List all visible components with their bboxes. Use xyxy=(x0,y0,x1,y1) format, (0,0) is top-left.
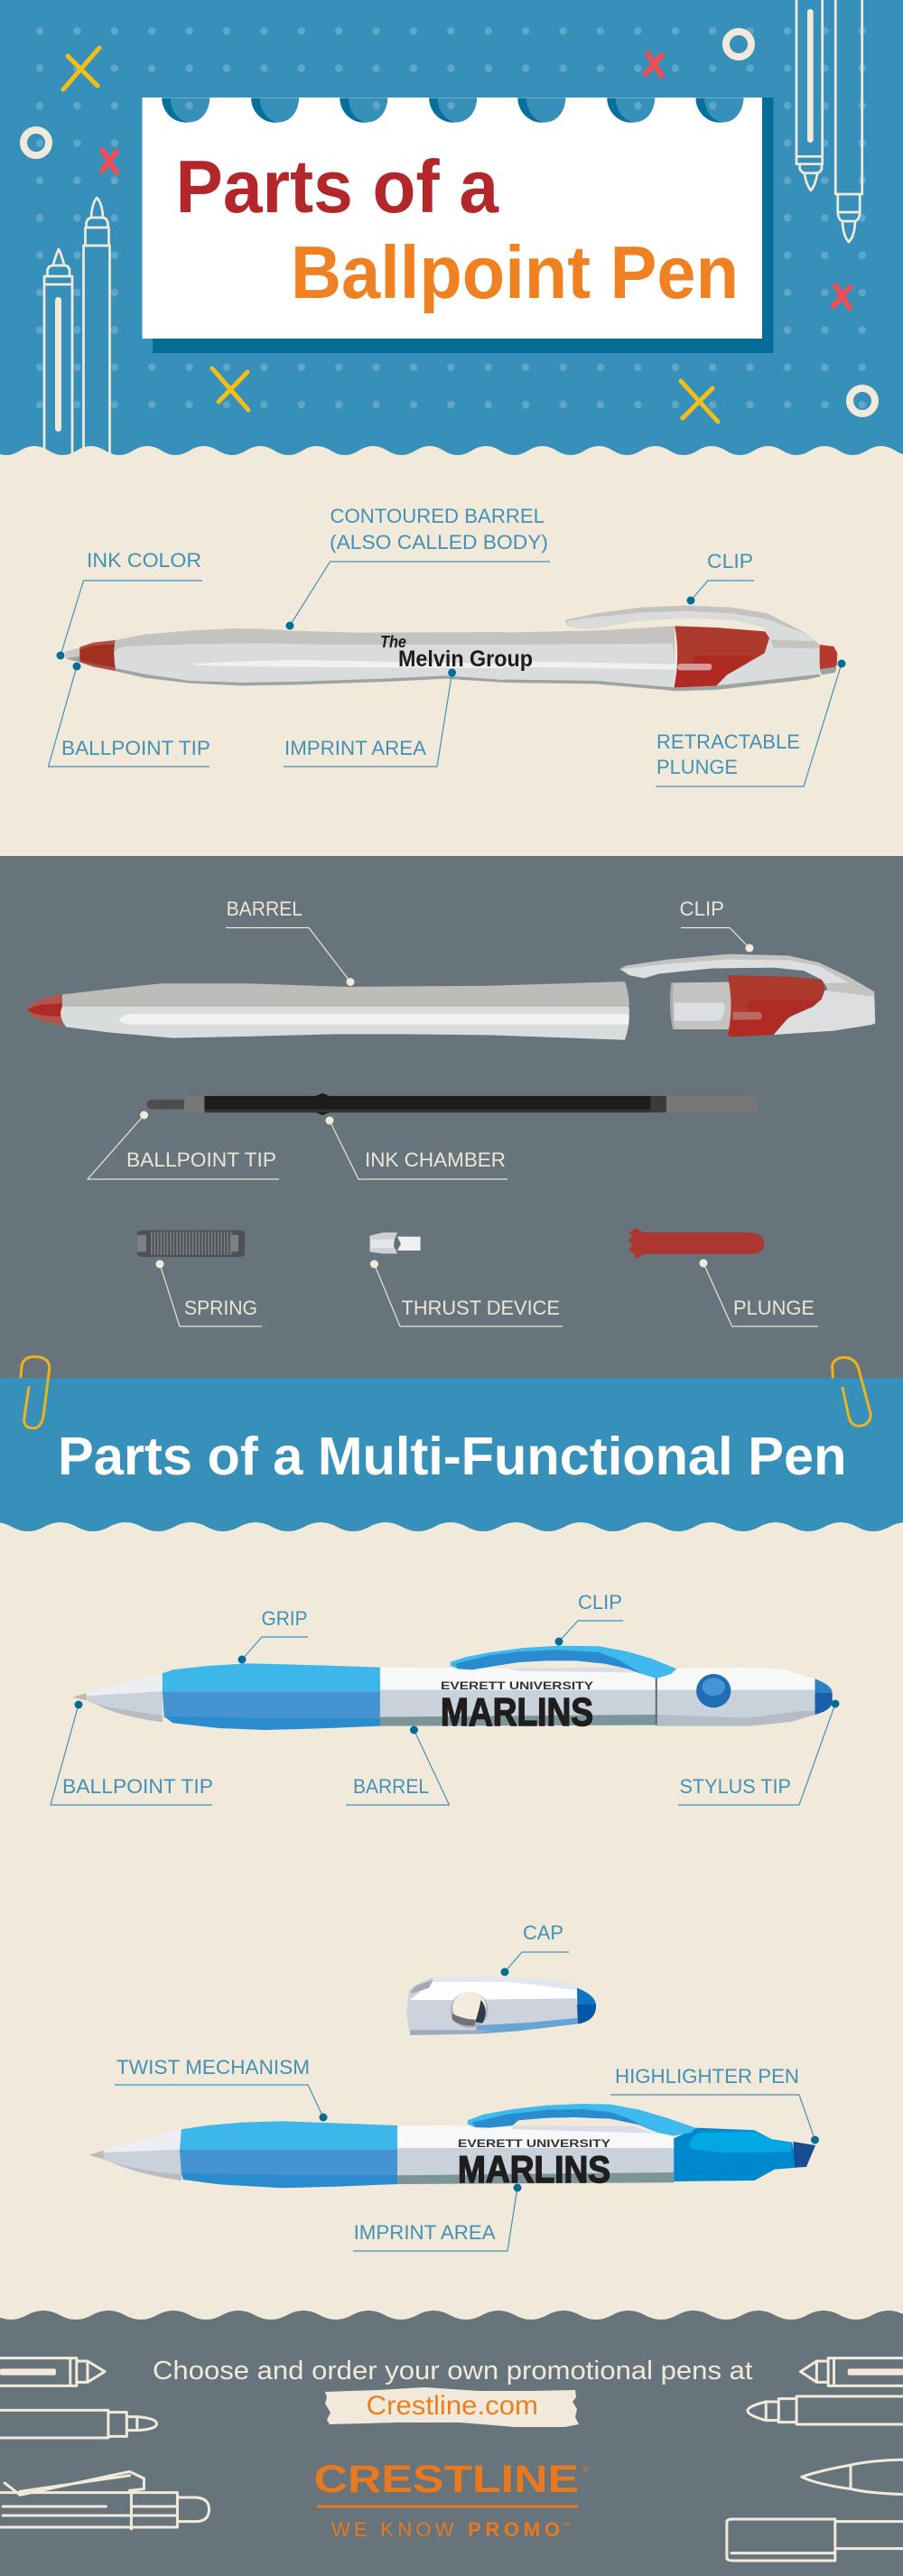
link badge xyxy=(325,2387,579,2427)
label: contoured barrel: (ALSO CALLED BODY) xyxy=(330,531,548,553)
panel: header xyxy=(0,0,903,460)
footer background with wave edge xyxy=(0,2311,903,2576)
imprint: Everett University Marlins: EVERETT UNIVERSITY xyxy=(458,2137,610,2150)
label: barrel xyxy=(226,897,354,986)
imprint: The Melvin Group: Melvin Group xyxy=(398,646,533,672)
illustration: stylus cap xyxy=(406,1976,596,2035)
illustration: thrust device xyxy=(369,1232,421,1254)
icon: ring bottom right xyxy=(850,388,875,414)
label: plunge xyxy=(699,1259,818,1326)
label: clip xyxy=(686,550,754,605)
illustration: upper barrel with clip xyxy=(578,954,875,1040)
label: thrust device xyxy=(370,1260,563,1326)
label: barrel: BARREL xyxy=(227,897,303,920)
link badge: Crestline.com xyxy=(367,2391,538,2421)
label: clip: CLIP xyxy=(679,897,724,920)
icon: yellow cross bottom right xyxy=(681,381,718,422)
icon: yellow cross bottom left xyxy=(212,368,248,410)
illustration: ink chamber xyxy=(147,1093,758,1115)
label: spring: SPRING xyxy=(184,1297,257,1319)
icon: red cross left xyxy=(102,150,116,172)
panel: multi-function pen two xyxy=(89,1921,819,2251)
panel: assembled ballpoint pen xyxy=(49,505,845,786)
icon: red cross right xyxy=(833,285,850,308)
label: grip xyxy=(238,1607,308,1663)
logo: Crestline xyxy=(314,2458,590,2541)
icon: outlined pens left xyxy=(0,2358,209,2529)
logo: Crestline: ™ xyxy=(563,2521,571,2530)
label: ink chamber xyxy=(325,1116,507,1179)
panel: disassembled pen xyxy=(0,856,903,1380)
card punch holes xyxy=(162,98,743,123)
label: contoured barrel: CONTOURED BARREL xyxy=(330,505,545,527)
illustration: plunge xyxy=(628,1228,764,1259)
label: ballpoint tip: BALLPOINT TIP xyxy=(126,1149,276,1171)
label: plunge: PLUNGE xyxy=(733,1297,815,1319)
label: barrel: BARREL xyxy=(353,1775,429,1798)
label: imprint area xyxy=(353,2183,522,2251)
label: retractable plunge: PLUNGE xyxy=(656,756,738,778)
panel: footer xyxy=(0,2311,903,2576)
label: imprint area: IMPRINT AREA xyxy=(284,737,426,759)
panel: multi-function pen one xyxy=(51,1591,840,1805)
label: ink chamber: INK CHAMBER xyxy=(365,1149,506,1171)
label: clip: CLIP xyxy=(707,550,753,572)
illustration: red and white ballpoint pen xyxy=(65,606,837,691)
label: retractable plunge xyxy=(656,659,845,786)
icon: outlined pens right xyxy=(727,2358,903,2561)
label: thrust device: THRUST DEVICE xyxy=(401,1297,560,1319)
imprint: The Melvin Group xyxy=(380,633,533,672)
illustration: blue grip pen xyxy=(72,1646,833,1730)
call to action text: Choose and order your own promotional pens at xyxy=(153,2357,753,2385)
label: clip xyxy=(554,1591,623,1645)
label: clip: CLIP xyxy=(578,1591,622,1613)
icon: yellow cross top left xyxy=(63,48,99,89)
label: highlighter pen xyxy=(610,2065,819,2144)
label: clip xyxy=(679,897,753,952)
imprint: Everett University Marlins: MARLINS xyxy=(441,1690,593,1734)
label: highlighter pen: HIGHLIGHTER PEN xyxy=(615,2065,799,2088)
icon: ring top xyxy=(726,32,751,57)
illustration: barrel xyxy=(28,981,629,1040)
icon: outlined pens bottom left xyxy=(44,198,110,460)
label: ballpoint tip: BALLPOINT TIP xyxy=(61,737,210,759)
imprint: Everett University Marlins xyxy=(441,1679,593,1734)
heading: Parts of a Multi-Functional Pen xyxy=(58,1427,847,1486)
icon: right paper clip xyxy=(833,1357,870,1426)
logo: Crestline: CRESTLINE xyxy=(314,2458,579,2501)
label: ballpoint tip xyxy=(49,663,210,767)
label: imprint area xyxy=(284,668,456,767)
imprint: Everett University Marlins: MARLINS xyxy=(458,2148,610,2190)
title line 1: Parts of a xyxy=(175,144,499,228)
label: grip: GRIP xyxy=(262,1607,307,1630)
note card xyxy=(143,98,773,353)
icon: outlined pens top right xyxy=(796,0,862,242)
label: stylus tip xyxy=(678,1699,840,1805)
label: twist mechanism xyxy=(115,2056,327,2122)
label: imprint area: IMPRINT AREA xyxy=(354,2221,496,2244)
imprint: The Melvin Group: The xyxy=(380,633,406,651)
logo: Crestline: WE KNOW xyxy=(331,2518,454,2541)
icon: ring left xyxy=(23,130,49,155)
label: barrel xyxy=(346,1726,450,1805)
label: ballpoint tip xyxy=(51,1701,213,1805)
label: cap xyxy=(500,1921,569,1976)
label: contoured barrel xyxy=(285,505,550,630)
icon: left paper clip xyxy=(21,1357,50,1428)
label: ink color: INK COLOR xyxy=(87,549,201,572)
imprint: Everett University Marlins: EVERETT UNIVERSITY xyxy=(441,1679,593,1692)
label: stylus tip: STYLUS TIP xyxy=(679,1775,791,1798)
label: ballpoint tip: BALLPOINT TIP xyxy=(62,1775,213,1798)
label: ink color xyxy=(56,549,202,659)
label: spring xyxy=(155,1260,262,1326)
logo: Crestline: ® xyxy=(582,2465,590,2475)
illustration: spring xyxy=(137,1230,245,1257)
logo: Crestline: PROMO xyxy=(468,2518,560,2541)
panel: multi-functional heading band xyxy=(0,1357,903,1544)
label: retractable plunge: RETRACTABLE xyxy=(656,730,800,753)
illustration: highlighter pen xyxy=(89,2104,815,2188)
title line 2: Ballpoint Pen xyxy=(291,230,739,314)
label: ballpoint tip xyxy=(88,1111,279,1179)
wave: band bottom edge xyxy=(0,1522,903,1544)
label: twist mechanism: TWIST MECHANISM xyxy=(116,2056,310,2078)
wave: header bottom edge xyxy=(0,446,903,470)
label: cap: CAP xyxy=(523,1921,563,1944)
icon: red cross top xyxy=(646,53,662,76)
